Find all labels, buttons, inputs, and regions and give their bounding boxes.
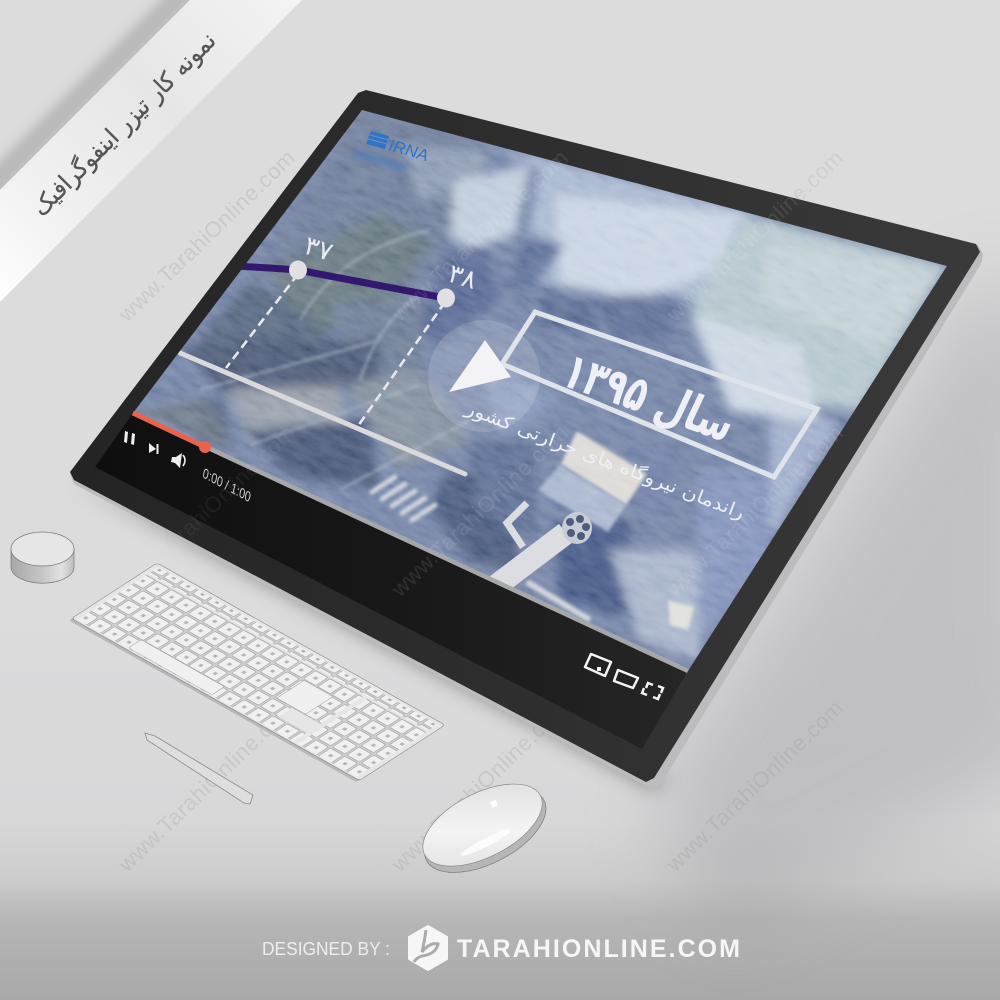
watermark behind monitor: www.TarahiOnline.com bbox=[661, 695, 848, 877]
watermark behind monitor bbox=[113, 145, 848, 877]
enter key bbox=[277, 680, 333, 714]
bright block bbox=[668, 600, 694, 630]
monitor bbox=[70, 90, 983, 786]
aerial photo patches bbox=[130, 110, 947, 660]
monitor bezel bbox=[70, 90, 980, 782]
numpad bbox=[298, 699, 426, 777]
chart value 37: ۳۷ bbox=[300, 231, 336, 268]
screen control bar bbox=[95, 413, 688, 749]
keyboard base bbox=[69, 563, 445, 782]
watermark over monitor: www.TarahiOnline.com bbox=[661, 420, 848, 602]
main keys bbox=[77, 575, 363, 742]
progress knob bbox=[199, 441, 211, 453]
striped plant blocks bbox=[372, 477, 435, 520]
stylus bbox=[145, 733, 253, 804]
brand name: TARAHIONLINE.COM bbox=[457, 935, 740, 963]
icon: pause bbox=[124, 431, 135, 445]
lower light strip bbox=[527, 582, 590, 620]
icon: next bbox=[149, 443, 158, 454]
beige rooftop bbox=[561, 431, 647, 505]
mouse logo bbox=[490, 800, 498, 808]
progress track bbox=[133, 413, 688, 671]
icon: volume bbox=[171, 453, 185, 468]
highlight circle bbox=[428, 320, 540, 432]
subtitle text: راندمان نیروگاه های حرارتی کشور bbox=[462, 397, 748, 524]
icon: theater mode bbox=[614, 670, 638, 688]
title arrow bbox=[449, 340, 511, 392]
title frame bbox=[502, 312, 817, 477]
footer credit bbox=[262, 926, 740, 970]
chart axis bbox=[180, 353, 465, 474]
keyboard bbox=[69, 563, 445, 782]
chart value 38: ۳۸ bbox=[444, 259, 480, 296]
dial puck bbox=[11, 532, 74, 583]
IRNA logo bbox=[353, 131, 430, 172]
chart dashed drop lines bbox=[226, 274, 445, 426]
watermark over monitor bbox=[113, 145, 848, 602]
watermark over monitor: www.TarahiOnline.com bbox=[386, 145, 573, 327]
corner ribbon bbox=[0, 0, 302, 302]
watermark over monitor: www.TarahiOnline.com bbox=[113, 420, 300, 602]
arrow key gap bbox=[278, 708, 323, 734]
watermark behind monitor: www.TarahiOnline.com bbox=[386, 695, 573, 877]
watermark behind monitor: www.TarahiOnline.com bbox=[113, 145, 300, 327]
function row bbox=[149, 567, 438, 731]
aerial roads bbox=[200, 230, 470, 490]
watermark behind monitor: www.TarahiOnline.com bbox=[113, 695, 300, 877]
watermark behind monitor: www.TarahiOnline.com bbox=[661, 420, 848, 602]
watermark over monitor: www.TarahiOnline.com bbox=[661, 145, 848, 327]
mouse bbox=[409, 767, 559, 890]
monitor shadow on desk bbox=[70, 270, 1000, 930]
progress played bbox=[133, 413, 205, 447]
designed by label: DESIGNED BY : bbox=[262, 939, 390, 959]
space bar bbox=[129, 640, 225, 695]
screen video frame bbox=[134, 110, 947, 671]
watermark over monitor: www.TarahiOnline.com bbox=[386, 420, 573, 602]
pipe stack bbox=[488, 503, 592, 592]
monitor silver edge bbox=[70, 91, 983, 788]
icon: fullscreen bbox=[642, 683, 663, 699]
texture overlay bbox=[134, 110, 947, 670]
ribbon title: نمونه کار تیزر اینفوگرافیک bbox=[26, 26, 222, 222]
chart data line bbox=[235, 266, 445, 298]
chart markers bbox=[289, 260, 455, 308]
time label: 0:00 / 1:00 bbox=[201, 464, 253, 505]
icon: miniplayer bbox=[585, 654, 611, 676]
light rooftop block bbox=[538, 465, 626, 532]
title text: سال ۱۳۹۵ bbox=[553, 343, 745, 453]
pipe holes bbox=[566, 515, 590, 540]
IRNA logo: IRNA bbox=[387, 136, 430, 165]
watermark behind monitor: www.TarahiOnline.com bbox=[661, 145, 848, 327]
logo hexagon bbox=[409, 926, 447, 970]
